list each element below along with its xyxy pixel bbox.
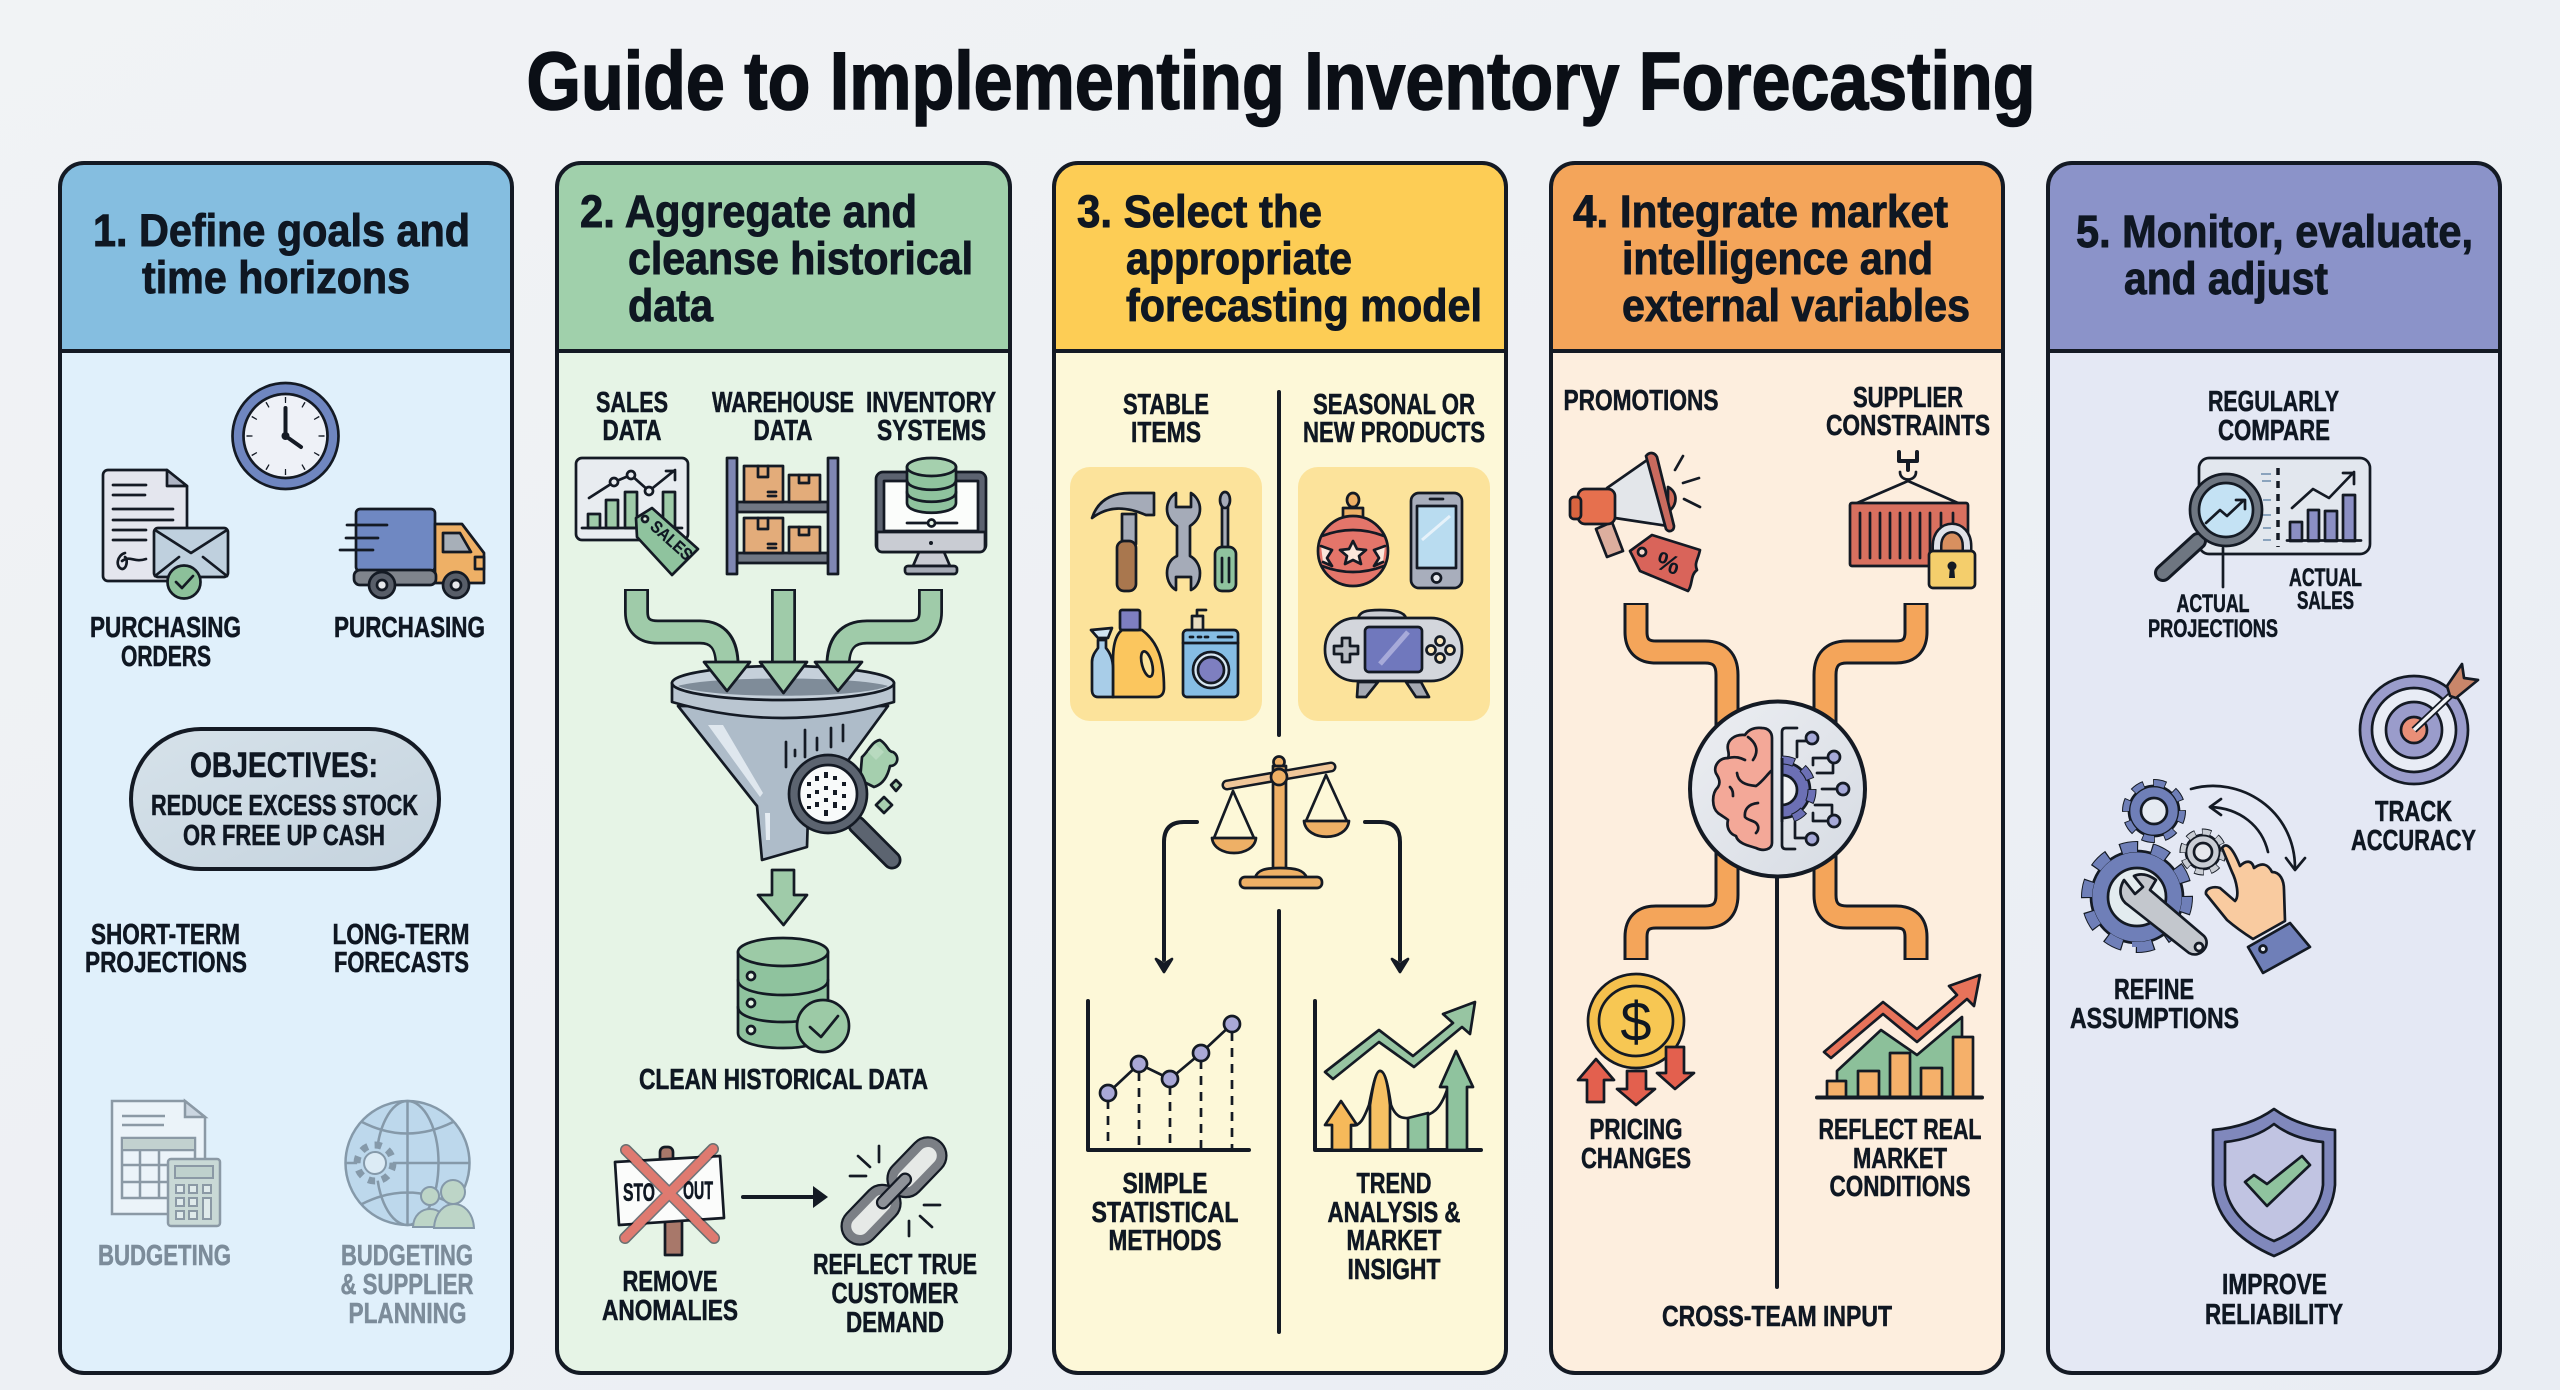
label: seasonal or new products (1303, 389, 1485, 449)
label: long-term forecasts (332, 919, 470, 979)
label: budgeting and supplier planning: & SUPPLIER (340, 1269, 474, 1301)
icon: gears, wrench and adjusting hand (2087, 783, 2310, 973)
objectives pill (131, 729, 439, 869)
label: short-term projections: SHORT-TERM (91, 919, 240, 951)
icon: clock (232, 383, 338, 489)
label: actual sales: ACTUAL (2289, 564, 2362, 592)
label: inventory systems: INVENTORY (866, 387, 996, 419)
icon: brain and circuit hub (1690, 702, 1865, 876)
label: simple statistical methods (1092, 1168, 1238, 1257)
heading: step 1: 1. Define goals and (93, 205, 470, 256)
label: warehouse data: DATA (754, 415, 813, 447)
label: purchasing orders: ORDERS (121, 641, 211, 673)
icon: rising market chart (1817, 975, 1982, 1098)
label: pricing changes: CHANGES (1581, 1143, 1691, 1175)
label: actual projections (2148, 590, 2278, 643)
label: remove anomalies: ANOMALIES (602, 1295, 738, 1327)
heading: step 4: intelligence and (1622, 233, 1933, 284)
label: seasonal or new products: SEASONAL OR (1313, 389, 1475, 421)
label: inventory systems (866, 387, 996, 447)
heading: step 5: and adjust (2124, 253, 2328, 304)
label: budgeting and supplier planning: PLANNING (348, 1298, 466, 1330)
label: reflect real market conditions: MARKET (1853, 1143, 1947, 1175)
icon: screwdriver (1215, 492, 1236, 591)
chart: trend analysis and market insight (1315, 1001, 1481, 1150)
label: sales data: SALES (596, 387, 668, 419)
icon: hammer (1092, 493, 1154, 591)
objectives pill: OBJECTIVES: (190, 746, 378, 785)
icon: target with arrow (2360, 664, 2478, 784)
icon: wrench (1167, 493, 1200, 590)
panel: step 5 monitor, evaluate, and adjust (2048, 163, 2500, 1373)
heading: step 4: 4. Integrate market (1573, 186, 1948, 237)
arrow: scale to trend analysis (1365, 822, 1408, 972)
icon: stock out sign crossed out: OUT (683, 1177, 713, 1205)
label: supplier constraints: CONSTRAINTS (1826, 410, 1990, 442)
label: warehouse data: WAREHOUSE (712, 387, 854, 419)
label: budgeting: BUDGETING (98, 1240, 231, 1272)
icon: sales chart and tag: SALES (646, 517, 696, 564)
label: supplier constraints (1826, 382, 1990, 442)
label: improve reliability: RELIABILITY (2205, 1299, 2343, 1331)
label: purchasing orders: PURCHASING (90, 612, 241, 644)
label: pricing changes: PRICING (1590, 1114, 1682, 1146)
label: refine assumptions: ASSUMPTIONS (2070, 1003, 2239, 1035)
label: trend analysis and market insight: TREND (1356, 1168, 1432, 1200)
objectives pill: OR FREE UP CASH (183, 820, 385, 852)
arrow: warehouse data into funnel (760, 589, 807, 693)
heading: step 3: appropriate (1126, 233, 1352, 284)
icon: smartphone (1411, 493, 1462, 588)
icon: stock out sign crossed out (615, 1147, 724, 1255)
label: long-term forecasts: FORECASTS (334, 947, 469, 979)
panel: step 3 select the appropriate forecasting model (1054, 163, 1506, 1373)
label: reflect true customer demand: CUSTOMER (832, 1278, 959, 1310)
heading: step 5 (2076, 206, 2473, 304)
label: sales data: DATA (602, 415, 662, 447)
label: actual projections: ACTUAL (2176, 590, 2250, 618)
heading: step 2: cleanse historical (628, 233, 973, 284)
heading: step 2: data (628, 280, 714, 331)
label: refine assumptions: REFINE (2114, 974, 2194, 1006)
icon: broken chain link (842, 1137, 946, 1245)
icon: handheld console (1325, 610, 1462, 697)
label: budgeting and supplier planning: BUDGETING (341, 1240, 473, 1272)
label: track accuracy (2351, 796, 2476, 857)
heading: step 3 (1077, 186, 1482, 331)
label: short-term projections: PROJECTIONS (85, 947, 247, 979)
heading: step 5: 5. Monitor, evaluate, (2076, 206, 2473, 257)
icon: monitor with database (876, 458, 986, 574)
label: actual sales (2289, 564, 2362, 615)
icon: compare dashboard with magnifier (2163, 458, 2370, 587)
icon: budget sheet and calculator (faded) (112, 1101, 220, 1226)
label: promotions: PROMOTIONS (1564, 385, 1718, 417)
icon: balance scale (1212, 756, 1349, 888)
label: reflect real market conditions: REFLECT REAL (1818, 1114, 1982, 1146)
title: Guide to Implementing Inventory Forecasting (526, 36, 2036, 127)
arrow: sales data into funnel (636, 589, 750, 691)
label: sales data (596, 387, 668, 447)
icon: stock out sign crossed out: STO (623, 1179, 655, 1207)
icon: shield with check (2213, 1109, 2335, 1256)
label: stable items: ITEMS (1131, 417, 1201, 449)
chart: simple statistical methods (1088, 1001, 1249, 1150)
arrow: funnel to clean data (758, 870, 807, 925)
heading: step 4 (1573, 186, 1970, 331)
label: purchasing orders (90, 612, 241, 673)
icon: globe with gear and people (faded) (345, 1101, 474, 1228)
label: warehouse data (712, 387, 854, 447)
label: stable items: STABLE (1123, 389, 1209, 421)
heading: step 3: forecasting model (1126, 280, 1482, 331)
icon: washing machine (1183, 610, 1238, 697)
icon: delivery truck (340, 509, 484, 598)
label: reflect true customer demand: DEMAND (846, 1307, 944, 1339)
label: reflect real market conditions (1818, 1114, 1982, 1203)
label: actual projections: PROJECTIONS (2148, 615, 2278, 643)
label: supplier constraints: SUPPLIER (1853, 382, 1963, 414)
connector pipes: inputs and outputs through hub (1636, 603, 1916, 960)
icon: purchase order document and envelope (103, 470, 228, 598)
label: purchasing: PURCHASING (334, 612, 485, 644)
label: regularly compare: REGULARLY (2208, 386, 2339, 418)
icon: sales chart and tag (576, 458, 698, 575)
label: reflect true customer demand: REFLECT TRUE (813, 1249, 977, 1281)
heading: step 1: time horizons (142, 252, 410, 303)
heading: step 1 (93, 205, 470, 303)
heading: step 2: 2. Aggregate and (580, 186, 917, 237)
icon: data funnel (672, 666, 894, 860)
label: clean historical data: CLEAN HISTORICAL DATA (639, 1064, 928, 1096)
icon: coin with price arrows (1578, 974, 1694, 1105)
label: reflect real market conditions: CONDITIONS (1830, 1171, 1970, 1203)
label: budgeting and supplier planning (340, 1240, 474, 1330)
label: refine assumptions (2070, 974, 2239, 1035)
icon: megaphone and discount tag: % (1653, 545, 1684, 581)
icon: detergent jug and spray bottle (1091, 610, 1164, 697)
arrow: remove anomalies to true demand (743, 1186, 828, 1208)
icon: clean database with check (738, 938, 849, 1052)
label: long-term forecasts: LONG-TERM (332, 919, 470, 951)
label: simple statistical methods: METHODS (1108, 1225, 1222, 1257)
panel: step 4 integrate market intelligence (1551, 163, 2003, 1373)
label: actual sales: SALES (2297, 587, 2354, 615)
label: trend analysis and market insight (1328, 1168, 1461, 1286)
panel: step 2 aggregate and cleanse historical data (557, 163, 1010, 1373)
heading: step 3: 3. Select the (1077, 186, 1322, 237)
panel: step 1 define goals and time horizons (60, 163, 512, 1373)
icon: warehouse shelving with boxes (727, 458, 838, 574)
label: regularly compare: COMPARE (2218, 415, 2330, 447)
icon: magnifier with filtered particles (789, 740, 901, 860)
label: inventory systems: SYSTEMS (877, 415, 986, 447)
objectives pill: REDUCE EXCESS STOCK (151, 790, 418, 822)
group: seasonal product icons (1298, 467, 1490, 721)
label: reflect true customer demand (813, 1249, 977, 1339)
label: track accuracy: ACCURACY (2351, 825, 2476, 857)
label: improve reliability: IMPROVE (2222, 1269, 2327, 1301)
label: trend analysis and market insight: INSIGHT (1348, 1254, 1441, 1286)
label: short-term projections (85, 919, 247, 979)
arrow: scale to simple methods (1156, 822, 1197, 972)
icon: coin with price arrows: $ (1620, 990, 1652, 1053)
label: improve reliability (2205, 1269, 2343, 1331)
label: trend analysis and market insight: ANALYSIS & (1328, 1197, 1461, 1229)
group: stable item icons (1070, 467, 1262, 721)
label: trend analysis and market insight: MARKET (1346, 1225, 1442, 1257)
icon: shipping container with padlock (1850, 452, 1975, 588)
arrow: inventory systems into funnel (815, 589, 930, 691)
label: stable items (1123, 389, 1209, 449)
label: pricing changes (1581, 1114, 1691, 1175)
label: simple statistical methods: STATISTICAL (1092, 1197, 1238, 1229)
label: remove anomalies: REMOVE (622, 1266, 718, 1298)
heading: step 2 (580, 186, 973, 331)
heading: step 4: external variables (1622, 280, 1970, 331)
label: remove anomalies (602, 1266, 738, 1327)
label: cross-team input: CROSS-TEAM INPUT (1662, 1301, 1892, 1333)
label: simple statistical methods: SIMPLE (1122, 1168, 1208, 1200)
label: seasonal or new products: NEW PRODUCTS (1303, 417, 1485, 449)
icon: ornament (1318, 493, 1388, 586)
label: regularly compare (2208, 386, 2339, 447)
icon: megaphone and discount tag (1570, 453, 1700, 591)
label: track accuracy: TRACK (2375, 796, 2452, 828)
